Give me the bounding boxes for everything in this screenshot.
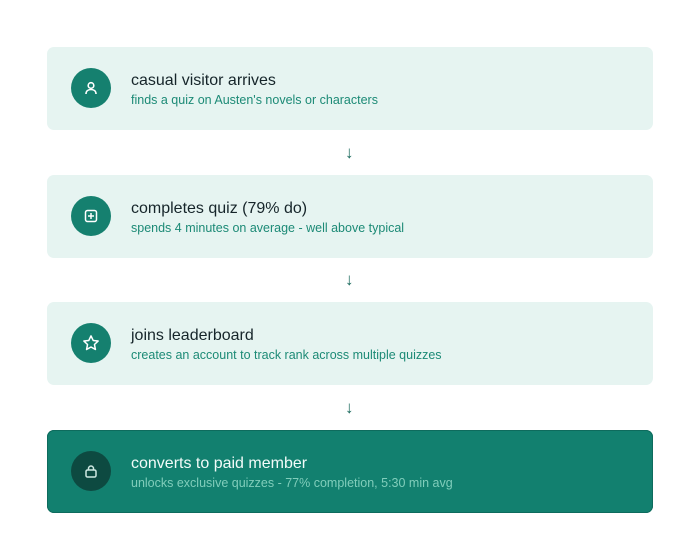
heading: casual visitor arrives [131, 72, 276, 89]
heading: converts to paid member [131, 455, 307, 472]
panel: step 2 [47, 175, 653, 258]
text: creates an account to track rank across multiple quizzes [131, 348, 442, 362]
panel: step 4 [47, 430, 653, 513]
icon: star [71, 323, 111, 363]
text: finds a quiz on Austen's novels or characters [131, 93, 378, 107]
arrow: ↓ [345, 143, 354, 162]
panel: step 3 [47, 302, 653, 385]
icon: lock [71, 451, 111, 491]
arrow: ↓ [345, 270, 354, 289]
arrow: ↓ [345, 398, 354, 417]
panel: step 1 [47, 47, 653, 130]
icon: person [71, 68, 111, 108]
text: spends 4 minutes on average - well above typical [131, 221, 404, 235]
icon: plus square [71, 196, 111, 236]
heading: completes quiz (79% do) [131, 200, 307, 217]
text: unlocks exclusive quizzes - 77% completion, 5:30 min avg [131, 476, 453, 490]
heading: joins leaderboard [131, 327, 254, 344]
